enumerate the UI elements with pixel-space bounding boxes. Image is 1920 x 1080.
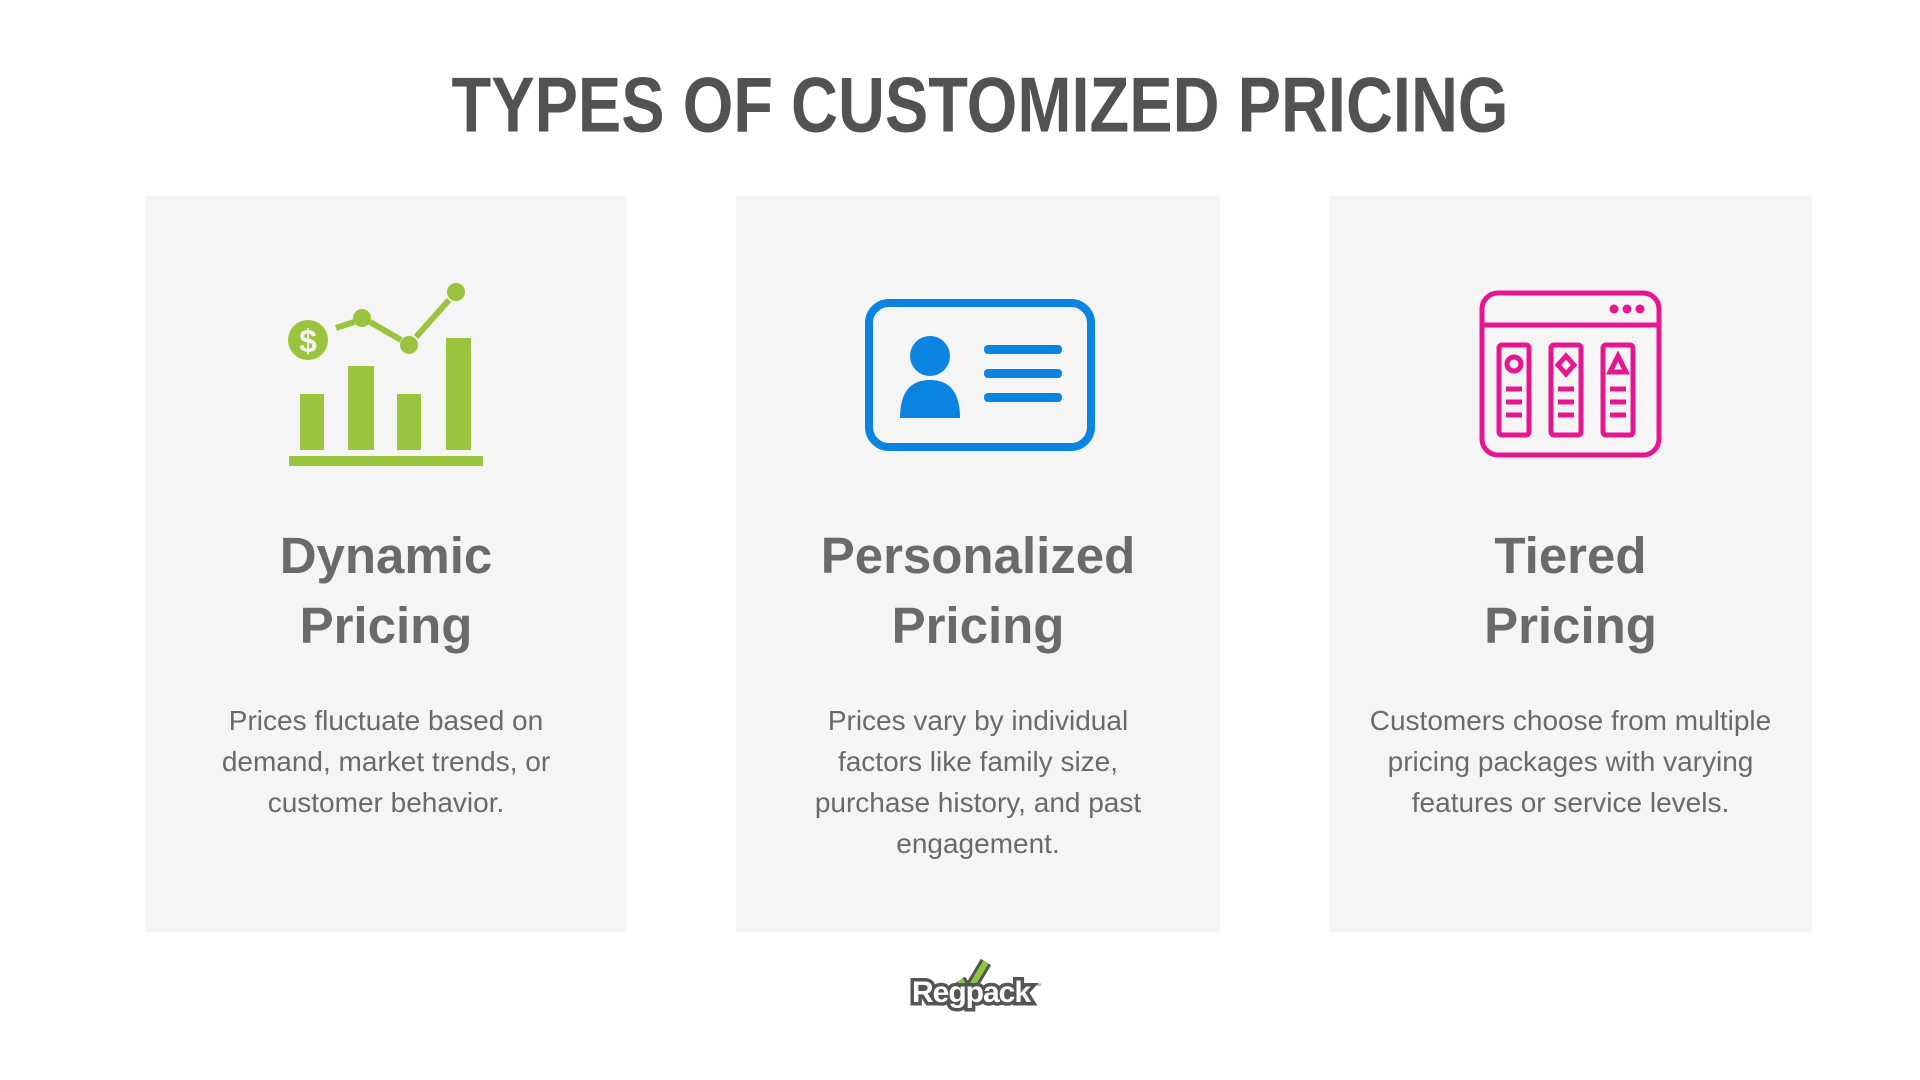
heading: dynamic — [280, 527, 492, 654]
icon: growth chart — [288, 283, 483, 466]
title: TYPES OF CUSTOMIZED PRICING — [452, 61, 1508, 148]
heading: tiered — [1484, 527, 1657, 654]
panel: dynamic pricing — [145, 196, 627, 932]
heading: personalized: Personalized — [821, 527, 1135, 584]
icon: id card — [865, 299, 1095, 451]
icon: pricing tiers window — [1480, 290, 1662, 458]
panel: personalized pricing — [736, 196, 1220, 932]
panel: tiered pricing — [1329, 196, 1812, 932]
icon: growth chart: $ — [299, 323, 317, 359]
text: dynamic description: Prices fluctuate based on demand, market trends, or customer behavior. — [222, 705, 550, 818]
heading: tiered: Pricing — [1484, 597, 1657, 654]
logo: Regpack: Regpack — [912, 976, 1031, 1009]
heading: tiered: Tiered — [1494, 527, 1647, 584]
logo: Regpack: ™ — [1034, 983, 1041, 990]
logo: Regpack — [910, 958, 1041, 1012]
heading: personalized: Pricing — [892, 597, 1064, 654]
text: tiered description: Customers choose from multiple pricing packages with varying features or service levels. — [1370, 705, 1771, 818]
heading: personalized — [821, 527, 1135, 654]
heading: dynamic: Pricing — [300, 597, 472, 654]
heading: dynamic: Dynamic — [280, 527, 492, 584]
text: personalized description: Prices vary by individual factors like family size, purchase history, and past engagement. — [815, 705, 1141, 859]
